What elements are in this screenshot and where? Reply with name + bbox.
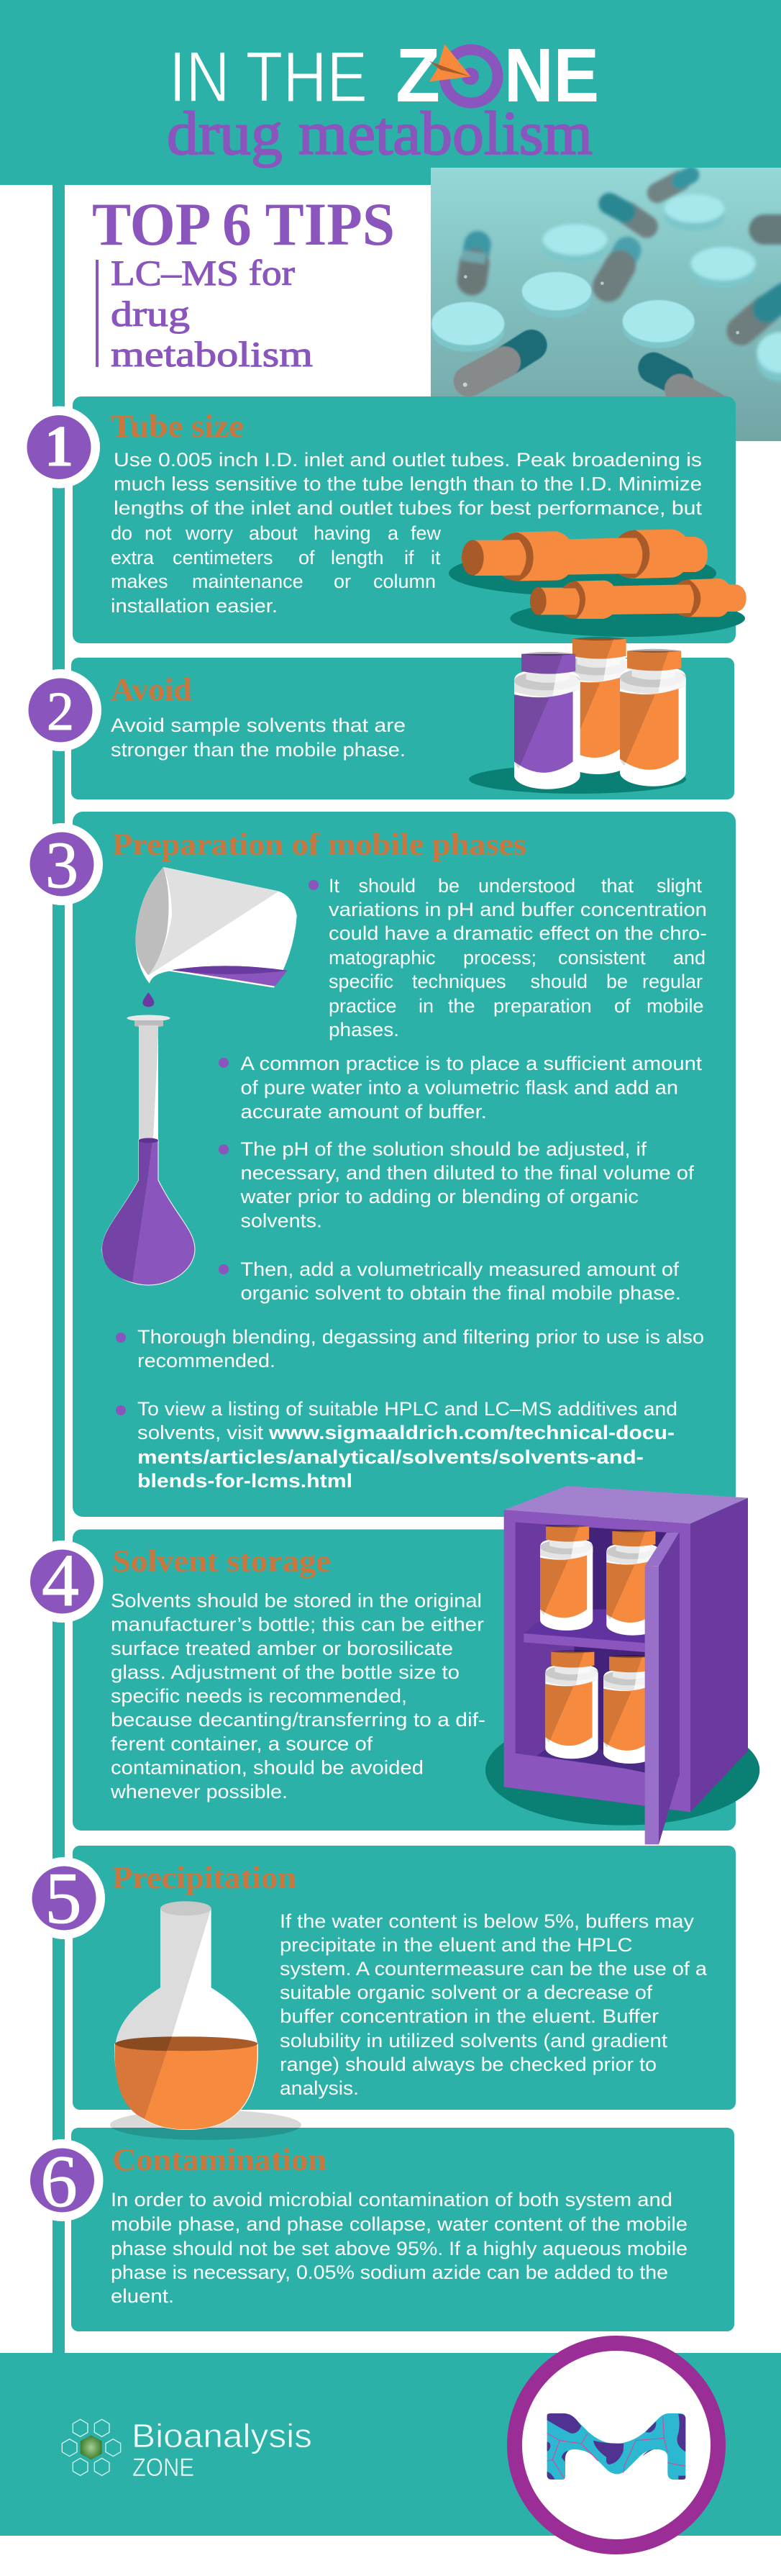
number badge 6 [22, 2139, 104, 2223]
body text: tube size: a [388, 522, 399, 544]
body text: precipitation: precipitate in the eluent and the HPLC [280, 1934, 633, 1956]
bullet 1: phases. [329, 1019, 399, 1040]
body text: contamination: In order to avoid microbial contamination of both system and [111, 2189, 672, 2210]
title: in the zone: IN THE [169, 37, 367, 117]
bullet 6: www.sigmaaldrich.com/technical-docu- [268, 1422, 675, 1443]
bullet 1: matographic [329, 947, 436, 969]
number badge 3 [21, 823, 103, 905]
body text: solvent storage: because decanting/transferring to a dif- [111, 1709, 485, 1731]
heading: top 6 tips [92, 191, 395, 374]
bullet 1: practice [329, 995, 397, 1017]
subheading: LC-MS for drug metabolism: LC–MS for [111, 253, 295, 293]
number badge 1 [18, 406, 100, 488]
bullet 4: Then, add a volumetrically measured amount of [240, 1258, 680, 1280]
body text: tube size: not [145, 522, 172, 544]
body text: solvent storage: whenever possible. [110, 1781, 288, 1802]
illustration: volumetric flask [102, 1015, 195, 1285]
heading: preparation of mobile phases: Preparation of mobile phases [112, 827, 526, 862]
heading: avoid: Avoid [111, 672, 192, 707]
body text: tube size: length [331, 547, 384, 568]
body text: tube size: worry [185, 522, 233, 544]
illustration: round flask with orange liquid [110, 1901, 301, 2140]
bullet 1: techniques [412, 971, 506, 992]
bullet 1: should [531, 971, 588, 992]
number badge 5 [23, 1857, 105, 1939]
body text: tube size: makes [111, 571, 168, 592]
panel: tip 4 solvent storage [22, 1486, 759, 1844]
logo: bioanalysis zone: ZONE [132, 2454, 194, 2482]
bullet 1: slight [657, 875, 703, 897]
bullet 1: preparation [493, 995, 592, 1017]
body text: tube size: extra [111, 547, 155, 568]
bullet 6: To view a listing of suitable HPLC and LC–MS additives and [137, 1398, 677, 1420]
body text: tube size: centimeters [173, 547, 273, 568]
bullet 3: water prior to adding or blending of organic [239, 1186, 639, 1207]
panel: tip 6 contamination [22, 2128, 734, 2331]
heading: top 6 tips: TOP 6 TIPS [92, 191, 395, 258]
bullet 4: organic solvent to obtain the final mobile phase. [240, 1282, 681, 1304]
body text: precipitation: buffer concentration in the eluent. Buffer [280, 2005, 659, 2027]
heading: precipitation: Precipitation [112, 1860, 296, 1895]
body text: precipitation: If the water content is below 5%, buffers may [280, 1910, 695, 1932]
logo: bioanalysis zone [62, 2417, 312, 2482]
bullet 5 [116, 1326, 704, 1371]
bullet 1: and [673, 947, 705, 969]
bullet 2: A common practice is to place a sufficient amount [240, 1053, 703, 1074]
body text: solvent storage: specific needs is recommended, [111, 1685, 407, 1707]
subheading: LC-MS for drug metabolism [96, 253, 313, 374]
bullet 6 [116, 1398, 677, 1492]
body text: avoid: stronger than the mobile phase. [111, 739, 406, 761]
icon: drop [142, 992, 154, 1007]
body text: tube size: it [431, 547, 441, 568]
bullet 5: recommended. [137, 1350, 275, 1371]
bullet 3 [219, 1138, 695, 1232]
bullet 3: The pH of the solution should be adjusted, if [240, 1138, 647, 1160]
number badge 1: 1 [45, 415, 73, 479]
body text: precipitation: suitable organic solvent or a decrease of [280, 1982, 653, 2003]
body text: precipitation: system. A countermeasure can be the use of a [280, 1958, 708, 1979]
body text: tube size: Use 0.005 inch I.D. inlet and outlet tubes. Peak broadening is [114, 449, 702, 471]
bullet 1: understood [478, 875, 575, 897]
number badge 6: 6 [40, 2141, 78, 2223]
body text: precipitation: analysis. [280, 2077, 359, 2099]
bullet 2 [219, 1053, 703, 1123]
bullet 3: necessary, and then diluted to the final volume of [240, 1162, 695, 1184]
bullet 6: ments/articles/analytical/solvents/solvents-and- [137, 1446, 644, 1468]
bullet 1: variations in pH and buffer concentration [329, 899, 707, 920]
body text: tube size [111, 449, 703, 617]
body text: precipitation [280, 1910, 708, 2099]
body text: tube size: installation easier. [111, 595, 278, 617]
body text: tube size: few [411, 522, 442, 544]
bullet 4 [219, 1258, 681, 1304]
bullet 1: consistent [558, 947, 646, 969]
number badge 5: 5 [45, 1858, 82, 1939]
body text: tube size: much less sensitive to the tube length than to the I.D. Minimize [114, 473, 702, 495]
body text: contamination: phase is necessary, 0.05% sodium azide can be added to the [111, 2262, 668, 2283]
bullet 1: in [419, 995, 434, 1017]
body text: solvent storage: manufacturer’s bottle; this can be either [111, 1613, 484, 1635]
bullet 6: blends-for-lcms.html [137, 1470, 352, 1492]
bullet 1: should [358, 875, 416, 897]
heading: contamination: Contamination [112, 2142, 326, 2177]
body text: tube size: about [249, 522, 298, 544]
number badge 2: 2 [47, 681, 74, 742]
body text: tube size: of [298, 547, 315, 568]
body text: precipitation: range) should always be checked prior to [280, 2054, 657, 2075]
bullet 1: be [438, 875, 460, 897]
bullet list: mobile phase preparation [116, 875, 707, 1492]
title: in the zone: Z [396, 33, 440, 118]
body text: contamination [111, 2189, 688, 2307]
header band [0, 0, 781, 185]
vertical timeline bar [52, 180, 65, 2360]
number badge 4 [22, 1539, 104, 1623]
bullet 1: the [448, 995, 475, 1017]
body text: contamination: mobile phase, and phase collapse, water content of the mobile [111, 2213, 688, 2235]
illustration: three bottles [469, 637, 686, 794]
bullet 1: mobile [647, 995, 704, 1017]
bullet 1: It [329, 875, 340, 897]
illustration: purple cabinet with bottles [485, 1486, 759, 1844]
bullet 1: be [606, 971, 628, 992]
body text: solvent storage: Solvents should be stored in the original [111, 1590, 482, 1612]
body text: tube size: having [314, 522, 371, 544]
bullet 1: specific [329, 971, 393, 992]
bullet 5: Thorough blending, degassing and filtering prior to use is also [137, 1326, 704, 1348]
number badge 2 [19, 669, 101, 751]
subheading: LC-MS for drug metabolism: drug [111, 294, 190, 334]
logo: merck m in ring [515, 2343, 718, 2547]
panel: tip 3 preparation of mobile phases [21, 812, 736, 1517]
title: in the zone: NE [504, 33, 599, 118]
number badge 3: 3 [45, 828, 78, 902]
panel: tip 2 avoid [19, 637, 734, 799]
icon: target with paper plane [429, 44, 498, 103]
panel: tip 1 tube size [18, 396, 746, 643]
footer band [0, 2343, 781, 2547]
bullet 1: could have a dramatic effect on the chro- [329, 922, 707, 944]
body text: tube size: column [373, 571, 436, 592]
body text: solvent storage: ferent container, a source of [111, 1733, 373, 1754]
body text: tube size: lengths of the inlet and outlet tubes for best performance, but [114, 497, 703, 519]
illustration: orange tubes [449, 530, 746, 637]
bullet 3: solvents. [240, 1210, 322, 1232]
heading: tube size: Tube size [111, 409, 244, 444]
icon: hexagon cluster [62, 2419, 121, 2475]
bullet 1: that [601, 875, 634, 897]
bullet 1: regular [642, 971, 703, 992]
body text: contamination: eluent. [111, 2285, 174, 2307]
body text: avoid: Avoid sample solvents that are [111, 715, 406, 736]
bullet 1: process; [463, 947, 536, 969]
body text: contamination: phase should not be set above 95%. If a highly aqueous mobile [111, 2238, 688, 2259]
body text: solvent storage: surface treated amber or borosilicate [111, 1638, 453, 1659]
body text: solvent storage: contamination, should be avoided [111, 1757, 424, 1779]
number badge 4: 4 [42, 1539, 79, 1622]
body text: avoid [111, 715, 406, 761]
body text: tube size: if [404, 547, 414, 568]
bullet 1 [309, 875, 707, 1040]
heading: solvent storage: Solvent storage [112, 1543, 331, 1579]
body text: tube size: or [334, 571, 351, 592]
subheading: LC-MS for drug metabolism: metabolism [111, 334, 313, 374]
bullet 1: of [614, 995, 631, 1017]
body text: precipitation: solubility in utilized solvents (and gradient [280, 2030, 668, 2051]
bullet 2: accurate amount of buffer. [240, 1101, 487, 1123]
logo: bioanalysis zone: Bioanalysis [132, 2417, 312, 2454]
title: in the zone [169, 33, 599, 118]
body text: tube size: do [111, 522, 132, 544]
photo: pills and capsules [431, 168, 781, 441]
subtitle: drug metabolism: drug metabolism [167, 99, 593, 168]
body text: tube size: maintenance [192, 571, 303, 592]
illustration: pouring beaker [135, 867, 297, 1007]
bullet 6: solvents, visit [137, 1422, 264, 1443]
bullet 2: of pure water into a volumetric flask and add an [240, 1076, 678, 1098]
body text: solvent storage [110, 1590, 485, 1802]
body text: solvent storage: glass. Adjustment of the bottle size to [111, 1661, 460, 1683]
panel: tip 5 precipitation [23, 1846, 736, 2140]
